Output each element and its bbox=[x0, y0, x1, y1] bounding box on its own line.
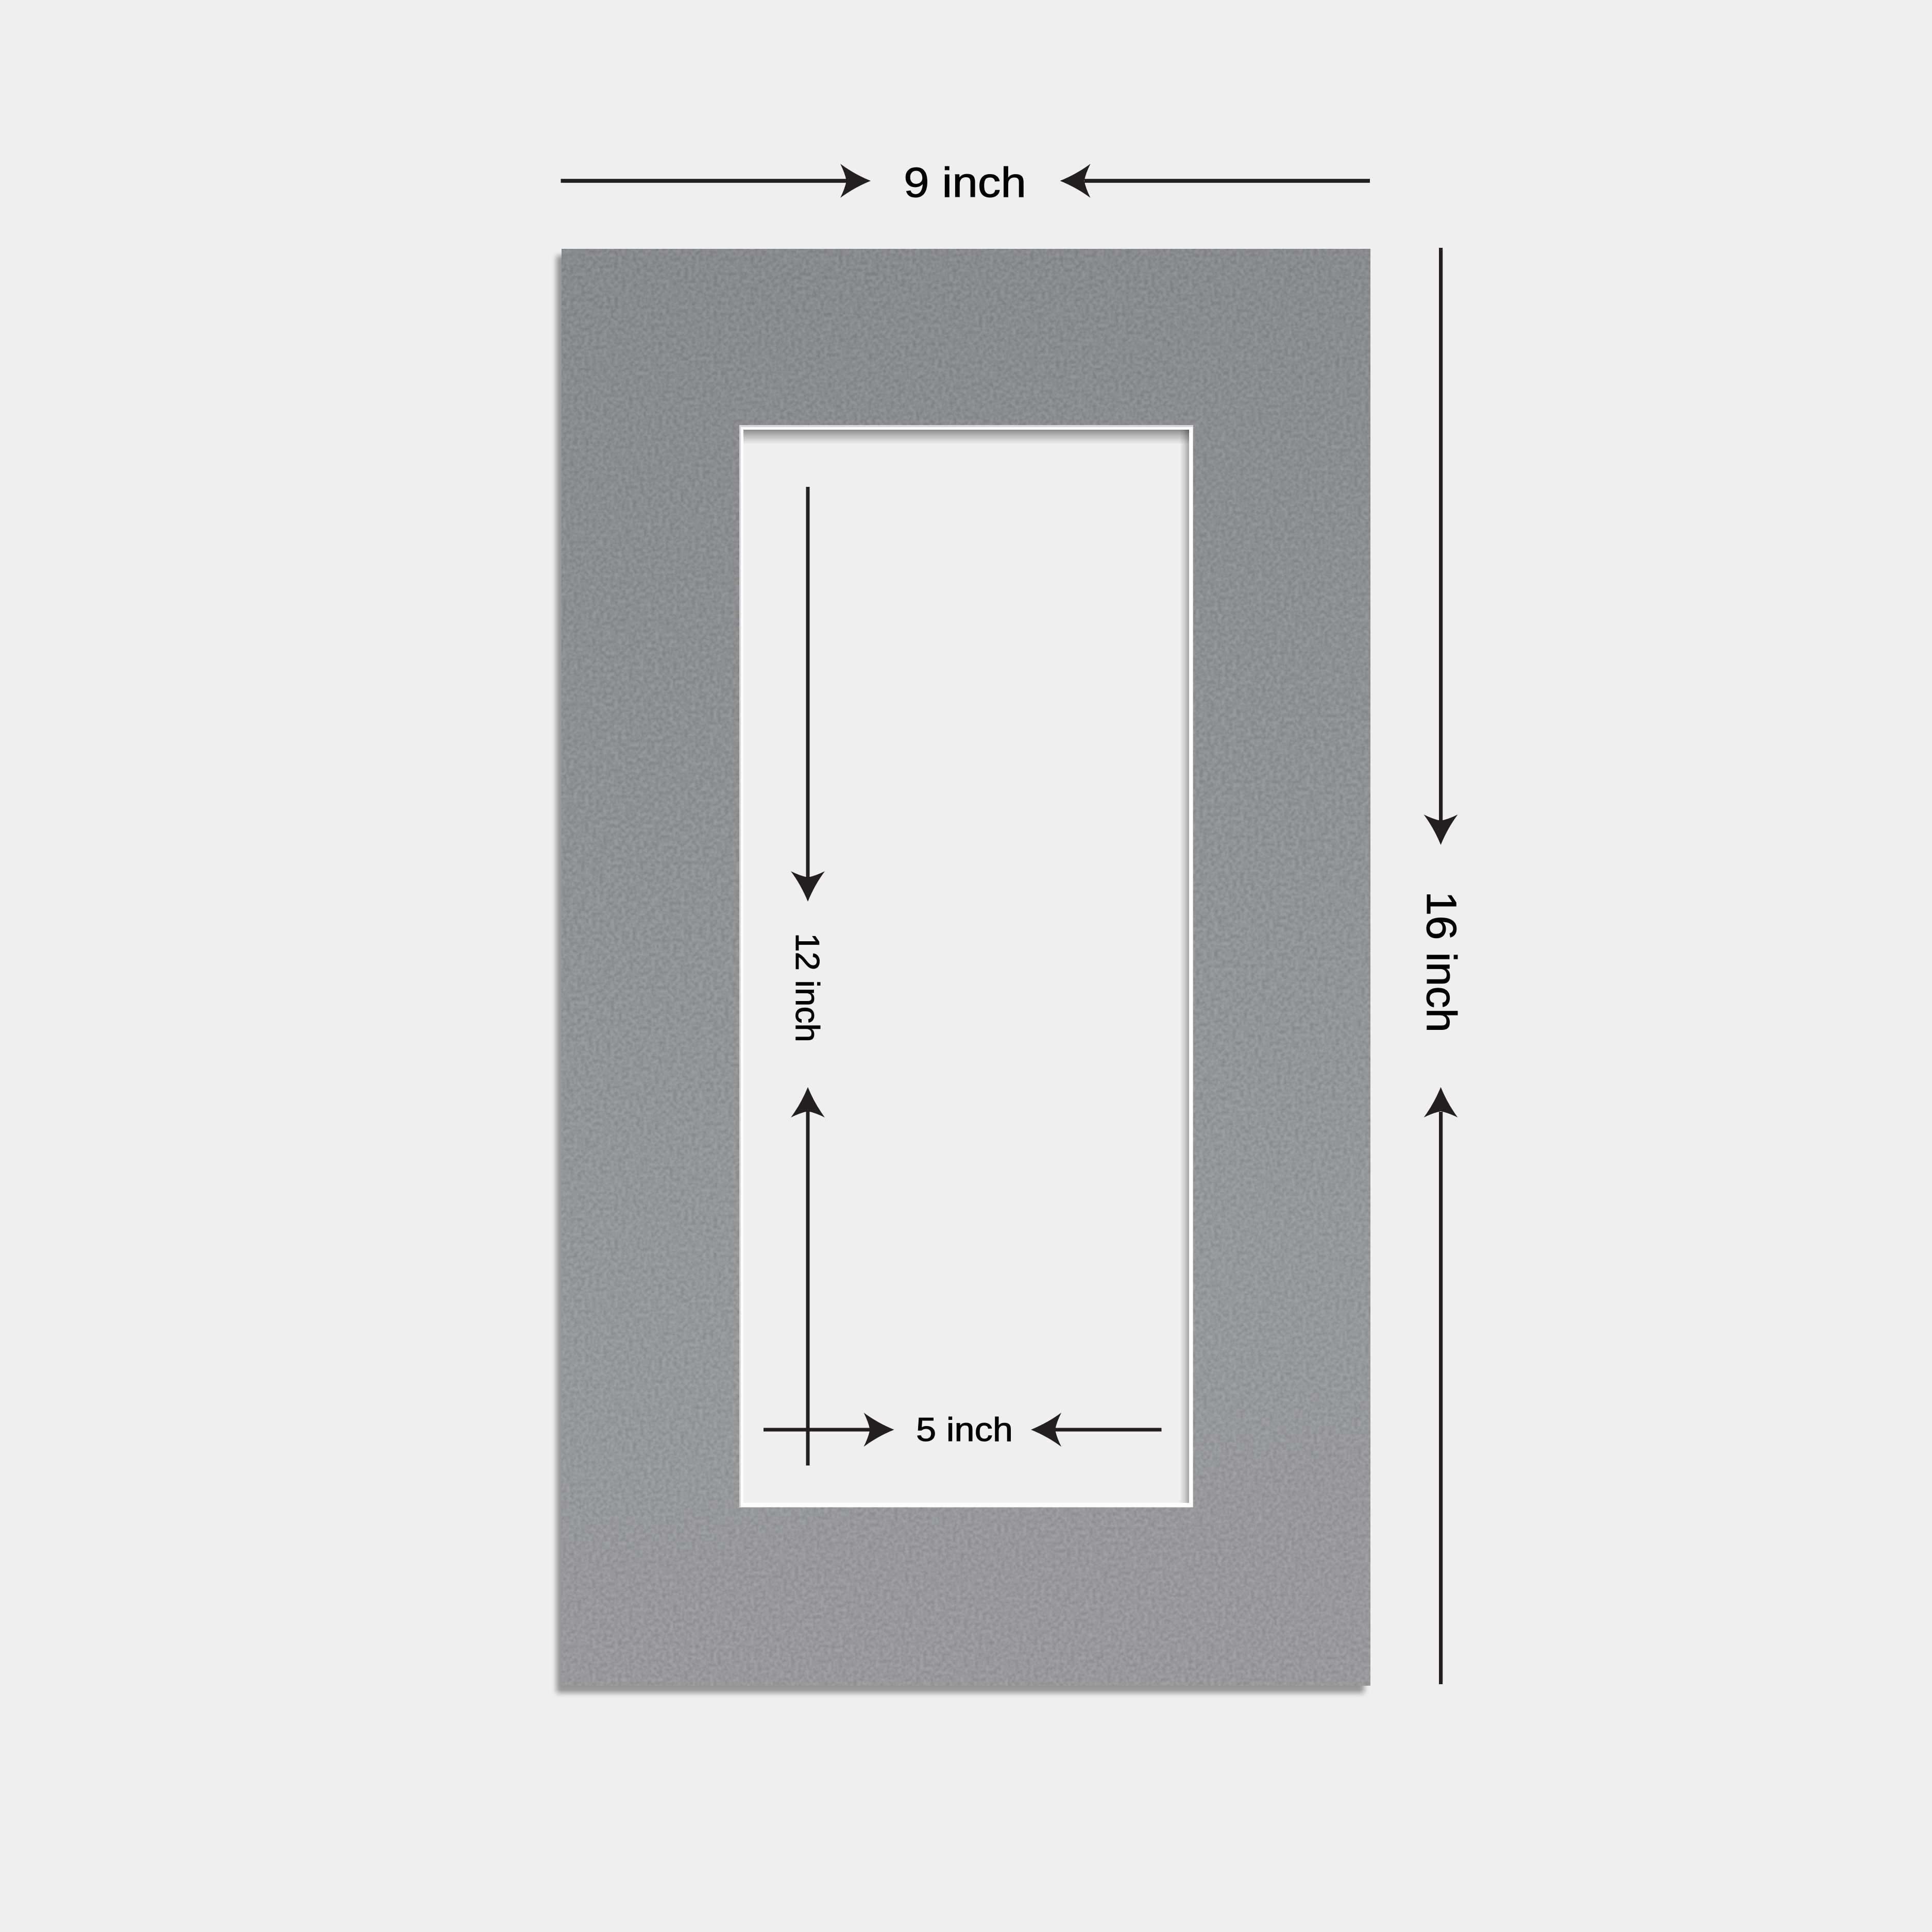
arrow: top width, left bbox=[561, 164, 871, 198]
label: 5 inch: 5 inch bbox=[916, 1411, 1013, 1448]
label: 16 inch: 16 inch bbox=[1418, 891, 1465, 1032]
arrow: outer height, top bbox=[1424, 248, 1458, 845]
arrow: window width, left bbox=[764, 1413, 894, 1447]
arrow: window height, top bbox=[791, 487, 825, 902]
label: 9 inch: 9 inch bbox=[904, 159, 1026, 206]
window opening bbox=[739, 425, 1193, 1507]
label: 12 inch: 12 inch bbox=[789, 933, 826, 1042]
arrow: outer height, bottom bbox=[1424, 1087, 1458, 1684]
mat surface bbox=[562, 249, 1370, 1686]
mat paper grain bbox=[562, 249, 1370, 1686]
arrow: top width, right bbox=[1060, 164, 1370, 198]
arrow: window width, right bbox=[1031, 1413, 1161, 1447]
mat drop shadow bbox=[556, 256, 1364, 1693]
panel: grey mat board bbox=[556, 249, 1370, 1693]
arrow: window height, bottom bbox=[791, 1087, 825, 1465]
